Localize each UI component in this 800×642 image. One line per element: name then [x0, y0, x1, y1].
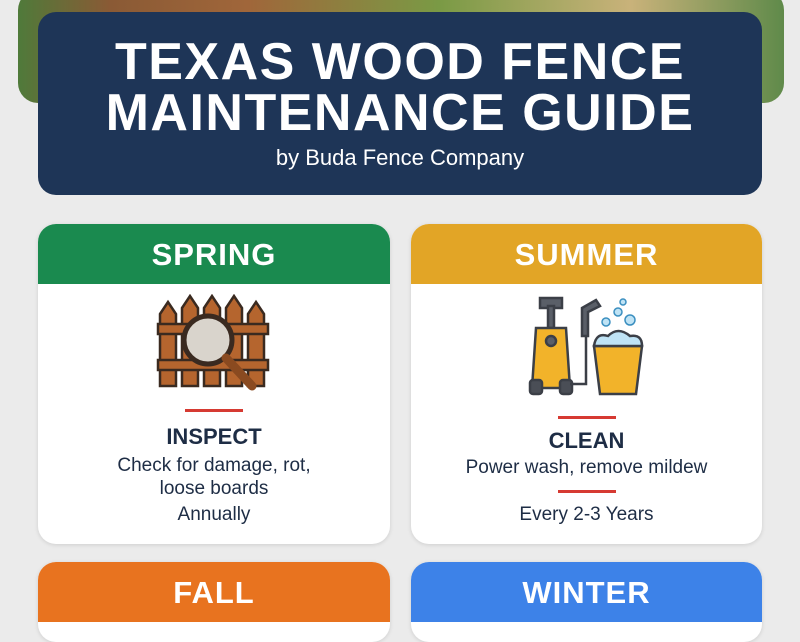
text: frequency: Every 2-3 Years	[519, 504, 654, 525]
title: TEXAS WOOD FENCE	[115, 33, 685, 91]
panel: fall	[38, 562, 390, 642]
header: summer: SUMMER	[515, 237, 658, 272]
panel: spring	[38, 224, 390, 544]
icon: fence with magnifier	[156, 294, 270, 390]
icon: pressure washer and bucket	[528, 296, 644, 396]
text: frequency: Annually	[178, 504, 250, 525]
text: description	[117, 455, 311, 499]
title: MAINTENANCE GUIDE	[106, 84, 694, 142]
text: description: loose boards	[160, 478, 268, 499]
panel: winter	[411, 562, 762, 642]
header: summer	[411, 224, 762, 284]
title	[106, 33, 694, 142]
text: clean: CLEAN	[549, 428, 624, 453]
header: winter: WINTER	[522, 575, 651, 610]
header: spring: SPRING	[152, 237, 276, 272]
panel: summer	[411, 224, 762, 544]
subtitle: by Buda Fence Company	[276, 145, 524, 170]
header: winter	[411, 562, 762, 622]
header: fall: FALL	[173, 575, 255, 610]
header: fall	[38, 562, 390, 622]
title banner	[38, 12, 762, 195]
text: inspect: INSPECT	[166, 424, 262, 449]
text: description: Power wash, remove mildew	[466, 457, 707, 478]
header: spring	[38, 224, 390, 284]
background scene illustration	[18, 0, 784, 103]
text: description: Check for damage, rot,	[117, 455, 311, 476]
